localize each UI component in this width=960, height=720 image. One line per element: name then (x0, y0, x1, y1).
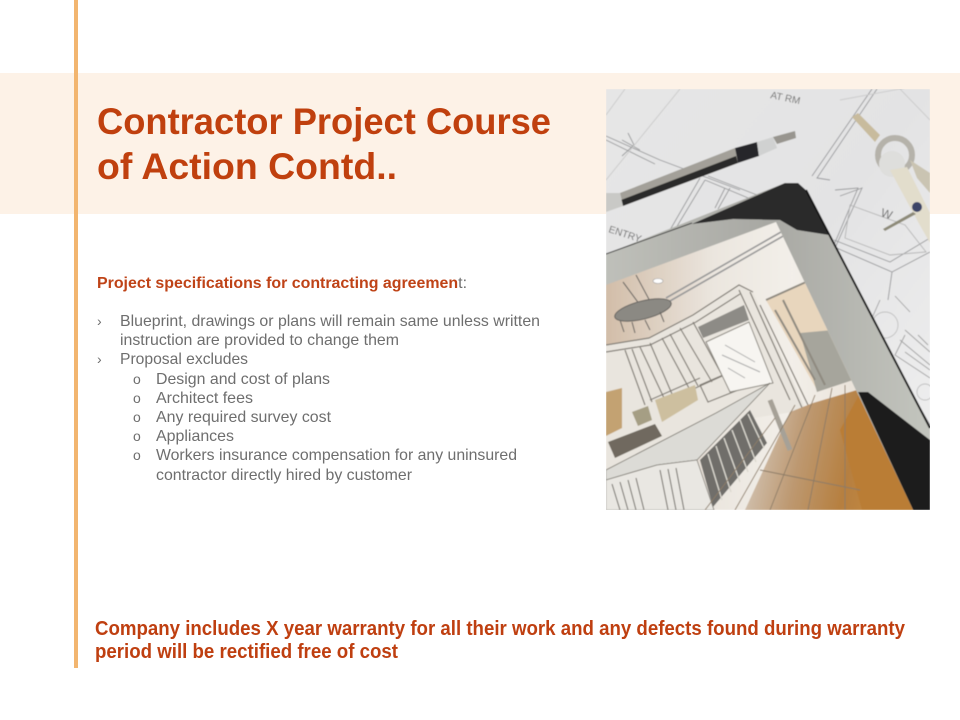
photo: blueprint, tablet and drafting tools (606, 88, 933, 510)
kitchen island (606, 383, 770, 480)
fridge (706, 322, 773, 392)
sub-bullet: architect: o (133, 390, 141, 406)
floorboards (705, 385, 860, 510)
chandelier (613, 275, 673, 333)
header band (0, 73, 960, 214)
title (97, 101, 551, 187)
warranty callout: period will be rectified free of cost (95, 641, 398, 663)
sub-bullet: survey: o (133, 409, 141, 425)
compass (852, 113, 930, 243)
blueprint labels: ENTRY (607, 224, 643, 245)
island post (770, 400, 790, 450)
sub-bullet: workers insurance (133, 447, 517, 484)
title: of Action Contd.. (97, 146, 397, 187)
subheading: Project specifications for contracting agreement: (97, 275, 467, 292)
tablet black reflections (692, 183, 829, 235)
stove and counter items (608, 424, 662, 458)
warranty callout: Company includes X year warranty for all their work and any defects found during warranty (95, 618, 906, 640)
fridge ribbed panel (698, 305, 749, 338)
bullet: proposal excludes: › (97, 351, 102, 367)
bullet: blueprint: instruction are provided to change them (120, 332, 399, 349)
blueprint labels (607, 90, 895, 245)
mechanical pencil (606, 131, 796, 212)
tablet screen: kitchen sketch (606, 215, 916, 510)
bullet: blueprint: › (97, 313, 102, 329)
window and dining area (766, 283, 828, 386)
blueprint labels: W (879, 206, 895, 223)
back-wall tile glow (606, 388, 622, 436)
sub-bullet: architect: Architect fees (156, 390, 253, 407)
ceiling moulding (666, 232, 785, 301)
floor (745, 390, 913, 510)
sub-bullet: workers insurance: o (133, 447, 141, 463)
sub-bullet: workers insurance: Workers insurance compensation for any uninsured (156, 447, 517, 464)
vertical accent bar (74, 0, 78, 668)
tablet body (606, 183, 930, 510)
recessed light (653, 278, 663, 284)
blueprint linework (606, 88, 933, 425)
sub-bullet: survey: Any required survey cost (156, 409, 332, 426)
sub-bullet: appliances: o (133, 428, 141, 444)
sub-bullet: design: o (133, 371, 141, 387)
bullet: blueprint (97, 313, 540, 349)
cabinets (606, 316, 803, 470)
sub-bullet: design: Design and cost of plans (156, 371, 330, 388)
sub-bullet: appliances: Appliances (156, 428, 234, 445)
title: Contractor Project Course (97, 101, 551, 142)
blueprint labels: AT RM (769, 90, 801, 107)
bullet: proposal excludes: Proposal excludes (120, 351, 248, 368)
sub-bullet: workers insurance: contractor directly hired by customer (156, 467, 413, 484)
warranty callout (95, 618, 906, 663)
bullet: blueprint: Blueprint, drawings or plans will remain same unless written (120, 313, 540, 330)
bullet list (97, 313, 540, 484)
